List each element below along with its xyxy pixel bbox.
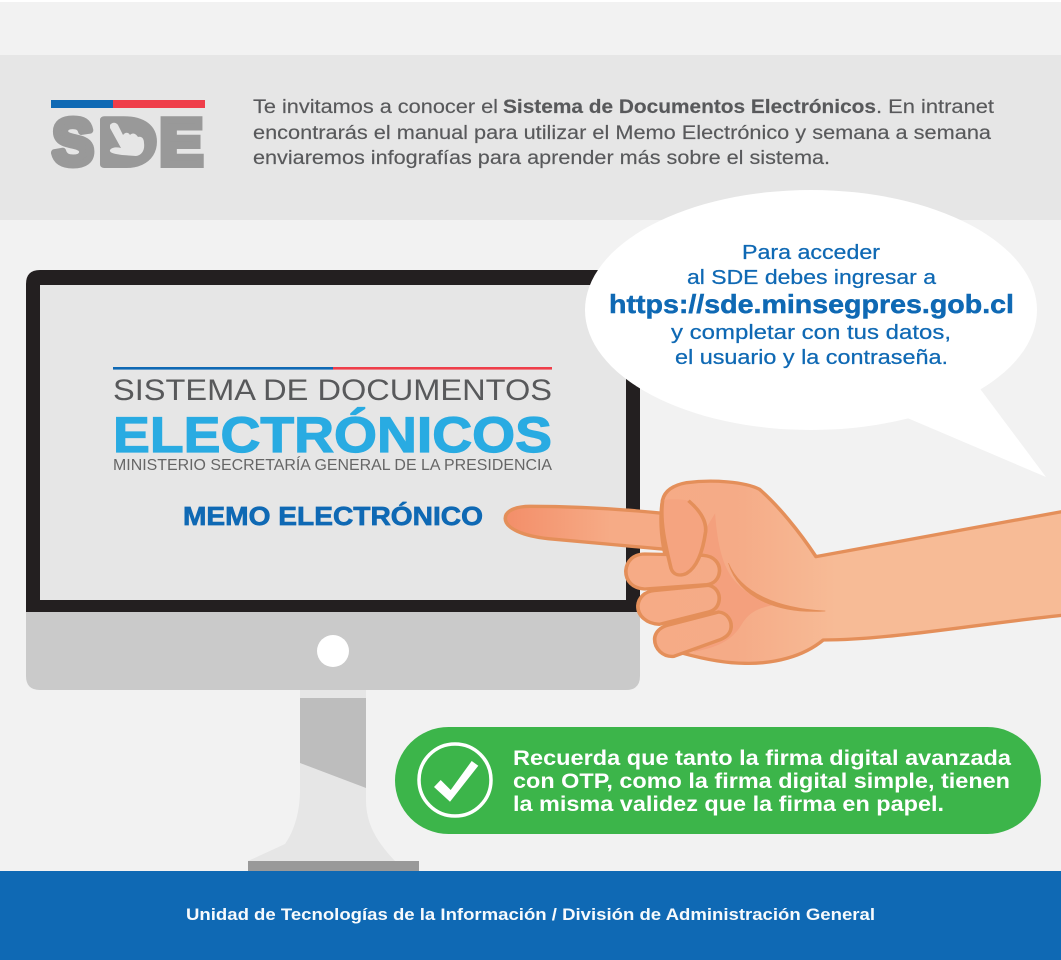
footer text: Unidad de Tecnologías de la Información / División de Administración General	[186, 905, 875, 924]
screen title: SISTEMA DE DOCUMENTOS	[113, 374, 552, 407]
bubble text: Para acceder	[742, 242, 880, 264]
note text: Recuerda que tanto la firma digital avanzada	[513, 747, 1011, 770]
thumb	[662, 499, 706, 575]
monitor stand	[248, 690, 419, 871]
header text: enviaremos infografías para aprender más sobre el sistema.	[253, 148, 830, 169]
SDE logo: S	[52, 106, 94, 178]
note text: la misma validez que la firma en papel.	[513, 793, 944, 816]
note text	[513, 747, 1011, 816]
header text: encontrarás el manual para utilizar el Memo Electrónico y semana a semana	[253, 123, 991, 144]
header text: . En intranet	[876, 97, 995, 118]
memo label: MEMO ELECTRÓNICO	[183, 501, 483, 531]
note text: con OTP, como la firma digital simple, tienen	[513, 770, 1010, 793]
bubble text: y completar con tus datos,	[671, 322, 951, 344]
screen title	[113, 367, 553, 474]
footer	[0, 871, 1061, 960]
palm shadow	[687, 513, 774, 652]
header band	[0, 55, 1061, 220]
SDE logo	[51, 100, 205, 178]
screen title: MINISTERIO SECRETARÍA GENERAL DE LA PRESIDENCIA	[113, 457, 553, 474]
header text: Sistema de Documentos Electrónicos	[503, 97, 876, 118]
icon: pointing hand	[505, 481, 1061, 663]
index finger	[505, 506, 666, 549]
bubble text: https://sde.minsegpres.gob.cl	[609, 289, 1014, 319]
header text	[253, 97, 995, 169]
screen title: ELECTRÓNICOS	[113, 407, 552, 463]
speech bubble	[585, 190, 1046, 477]
green note	[395, 727, 1041, 834]
bubble text: al SDE debes ingresar a	[687, 267, 937, 289]
monitor	[26, 270, 640, 871]
bubble text: el usuario y la contraseña.	[675, 347, 948, 369]
fingers	[626, 554, 720, 589]
palm and arm	[661, 481, 1061, 663]
SDE logo: E	[160, 106, 203, 178]
header text: Te invitamos a conocer el	[253, 97, 498, 118]
icon: check mark	[419, 744, 491, 816]
palm crease	[729, 563, 825, 611]
SDE logo: D	[99, 106, 156, 178]
bubble text	[609, 242, 1014, 369]
